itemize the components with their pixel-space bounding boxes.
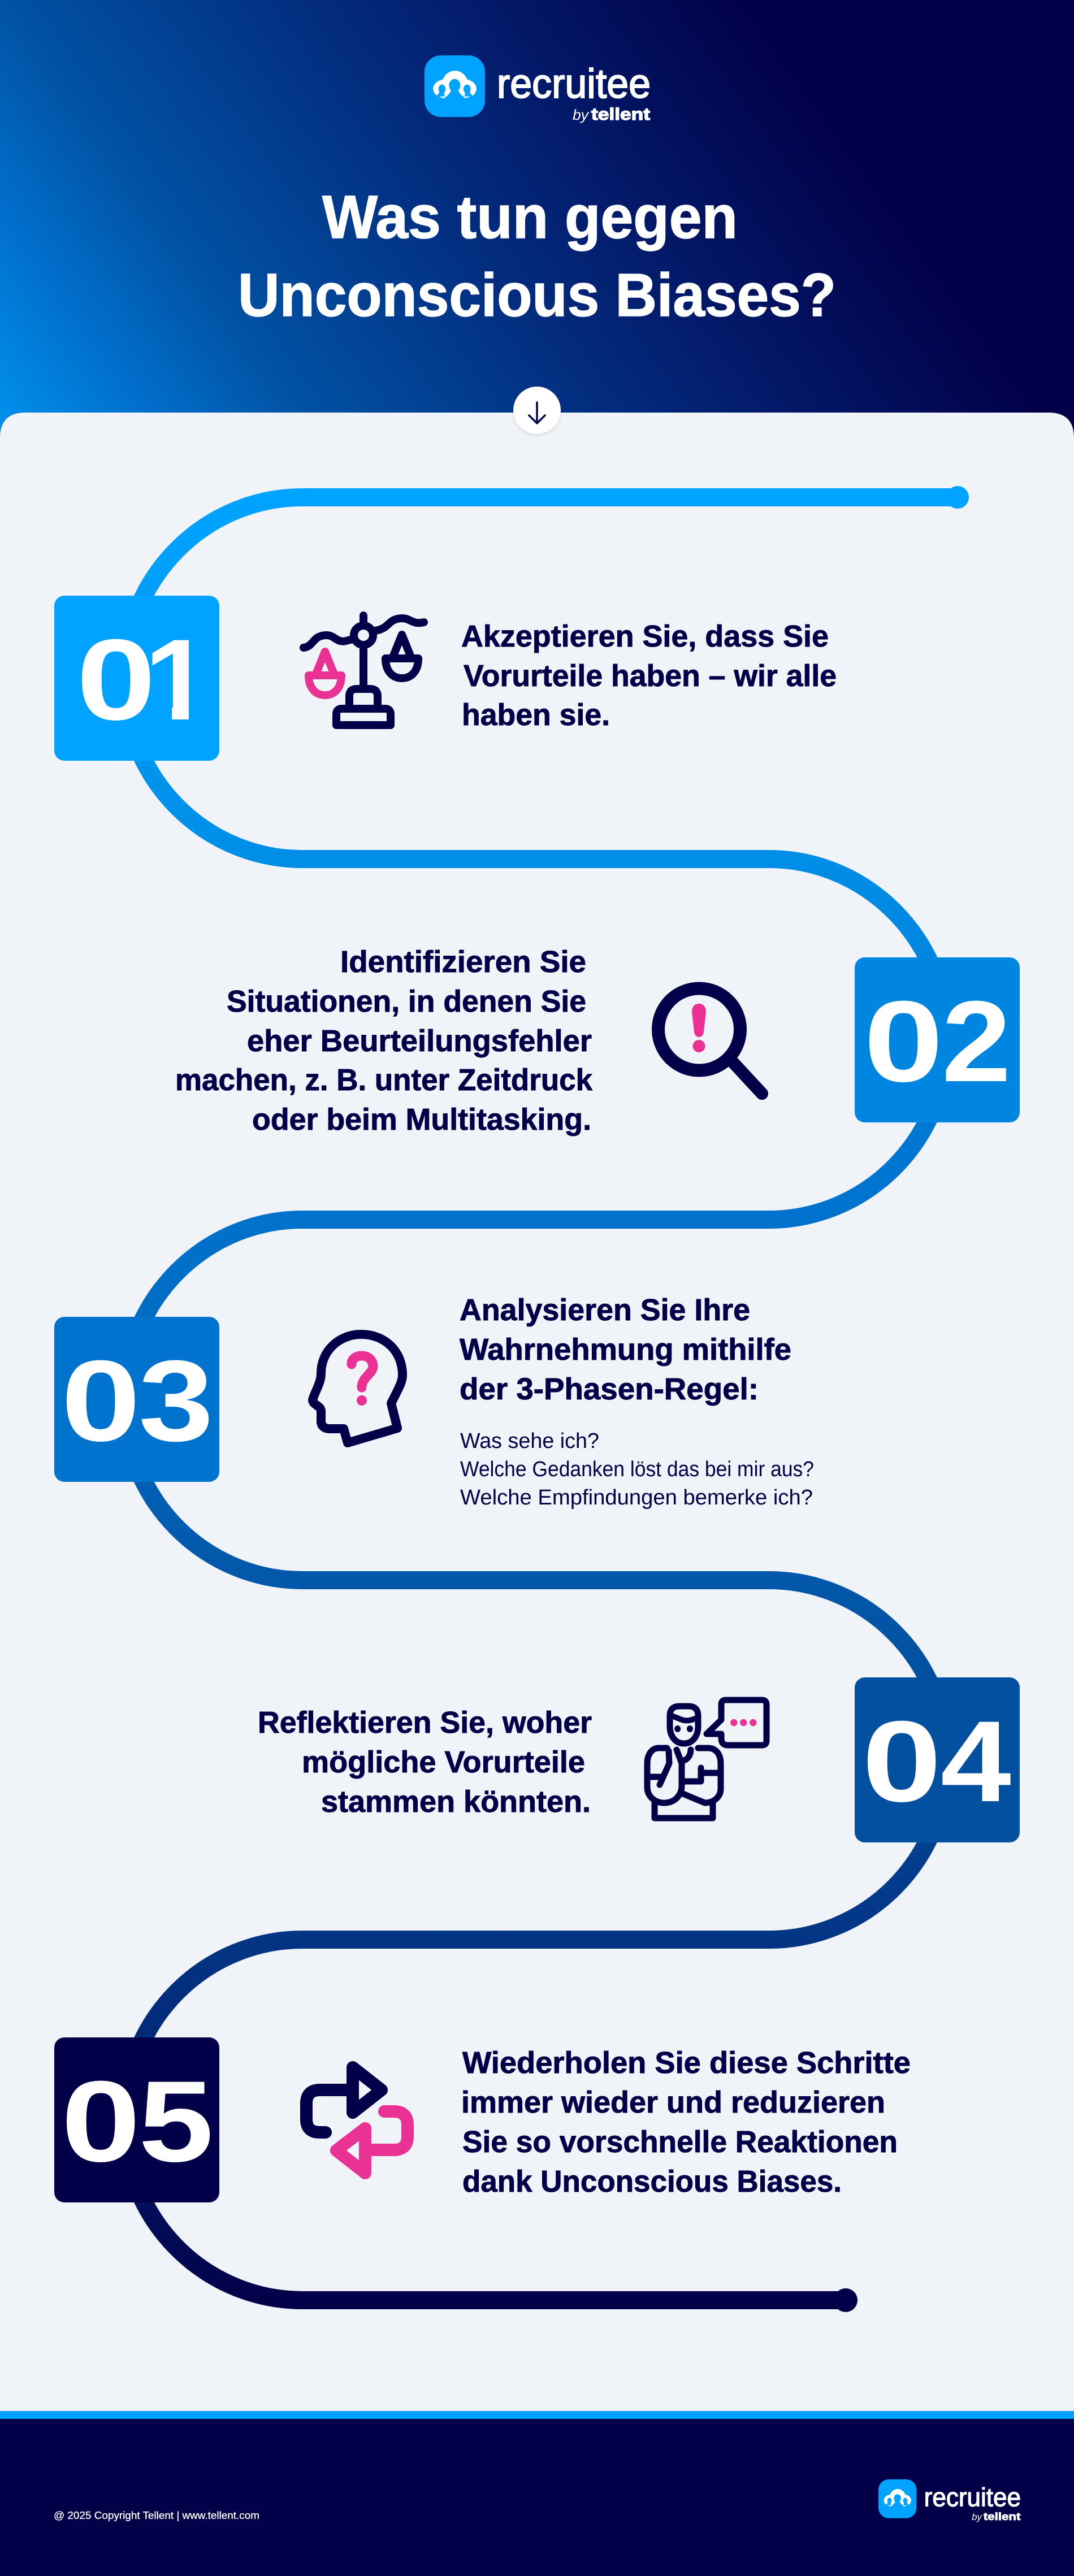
logo: recruitee footer: tellent <box>984 2511 1021 2523</box>
text: step 02: oder beim Multitasking. <box>252 1103 591 1137</box>
icon: head with question mark <box>313 1334 402 1443</box>
step 01 badge <box>54 596 219 761</box>
footer background <box>0 2419 1074 2576</box>
logo: recruitee footer <box>878 2479 1021 2523</box>
step 05 badge: 0 <box>61 2057 141 2186</box>
icon: thinking man with speech bubble <box>647 1700 766 1818</box>
text: step 04: stammen könnten. <box>321 1785 591 1819</box>
text: step 05: Wiederholen Sie diese Schritte <box>462 2046 911 2080</box>
text: step 02: Identifizieren Sie <box>340 945 586 979</box>
title: Unconscious Biases? <box>238 261 836 329</box>
step 02 badge: 2 <box>942 977 1011 1105</box>
logo: recruitee footer: recruitee <box>924 2482 1021 2512</box>
step 04 badge: 4 <box>941 1697 1011 1826</box>
step 01 badge: 0 <box>76 615 156 744</box>
step 02 badge: 0 <box>864 977 943 1106</box>
step 02 badge <box>855 957 1020 1122</box>
footer stripe <box>0 2411 1074 2419</box>
logo: recruitee header: recruitee <box>497 61 651 107</box>
logo: recruitee header: by <box>573 106 590 123</box>
icon: repeat arrows <box>306 2067 408 2173</box>
text: step 03 <box>460 1293 814 1510</box>
text: step 05 <box>461 2046 911 2198</box>
header background <box>0 0 1074 452</box>
text: step 01: haben sie. <box>462 698 610 732</box>
icon: scales <box>304 615 424 725</box>
text: step 05: Sie so vorschnelle Reaktionen <box>462 2125 898 2159</box>
text: step 03: Wahrnehmung mithilfe <box>460 1333 791 1367</box>
step 01 badge: 1 <box>144 615 213 744</box>
text: step 01 <box>461 619 837 732</box>
logo: recruitee header <box>425 55 651 124</box>
panel: content background <box>0 413 1074 2411</box>
text: step 02: machen, z. B. unter Zeitdruck <box>175 1063 593 1097</box>
text: step 04: mögliche Vorurteile <box>302 1745 585 1779</box>
text: step 03: der 3-Phasen-Regel: <box>460 1372 759 1406</box>
step 05 badge: 5 <box>138 2057 214 2186</box>
footer copyright: @ 2025 Copyright Tellent | www.tellent.com <box>54 2510 259 2521</box>
text: step 03: Was sehe ich? <box>460 1429 599 1453</box>
text: step 02 <box>175 945 593 1137</box>
icon: down arrow button <box>513 387 561 434</box>
title: Was tun gegen <box>322 183 738 251</box>
step 05 badge <box>54 2037 219 2202</box>
text: step 05: dank Unconscious Biases. <box>462 2165 842 2198</box>
text: step 05: immer wieder und reduzieren <box>461 2085 885 2119</box>
text: step 03: Welche Gedanken löst das bei mir aus? <box>460 1458 814 1481</box>
step 03 badge <box>54 1317 219 1482</box>
step 03 badge: 3 <box>138 1337 214 1465</box>
text: step 02: eher Beurteilungsfehler <box>247 1024 592 1058</box>
winding path <box>124 486 969 2312</box>
logo: recruitee footer: by <box>972 2512 982 2522</box>
text: step 04 <box>258 1706 592 1819</box>
step 03 badge: 0 <box>61 1336 141 1465</box>
text: step 04: Reflektieren Sie, woher <box>258 1706 592 1740</box>
text: step 01: Akzeptieren Sie, dass Sie <box>461 619 829 653</box>
text: step 01: Vorurteile haben – wir alle <box>464 659 837 693</box>
title <box>238 183 836 329</box>
step 04 badge <box>855 1677 1020 1842</box>
logo: recruitee header: tellent <box>591 105 650 124</box>
text: step 02: Situationen, in denen Sie <box>227 985 586 1018</box>
icon: magnifier <box>658 988 762 1094</box>
text: step 03: Analysieren Sie Ihre <box>460 1293 750 1327</box>
text: step 03: Welche Empfindungen bemerke ich? <box>460 1486 813 1510</box>
step 04 badge: 0 <box>862 1697 942 1826</box>
